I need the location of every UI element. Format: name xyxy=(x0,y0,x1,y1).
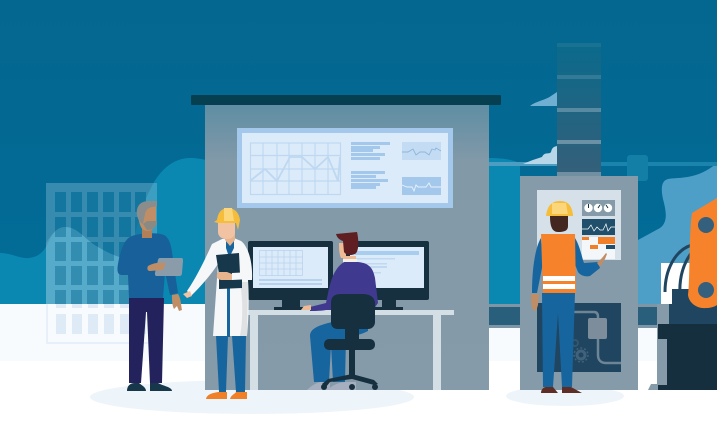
pipe band xyxy=(489,304,668,328)
pipe line xyxy=(489,155,717,181)
lower machine hatch xyxy=(537,303,621,372)
ground shadow under team xyxy=(90,380,414,414)
office chair xyxy=(321,294,378,390)
background sky xyxy=(0,0,717,304)
scientist in lab coat xyxy=(183,208,252,399)
machine cabinet xyxy=(520,43,638,390)
background office building xyxy=(46,183,157,344)
ground shadow under worker xyxy=(506,386,624,406)
clouds xyxy=(523,92,557,164)
floor xyxy=(0,304,717,444)
chimney xyxy=(557,43,601,176)
gear icons xyxy=(572,340,588,362)
robot arm xyxy=(648,198,717,390)
pulse chart bottom xyxy=(402,177,441,195)
light blue hill right xyxy=(638,163,717,304)
background hills right xyxy=(489,158,520,304)
tablet xyxy=(155,258,183,276)
desk xyxy=(247,310,454,390)
pulse readout xyxy=(582,219,615,235)
wall display xyxy=(237,128,453,208)
factory wall xyxy=(205,105,489,390)
text bars top xyxy=(351,142,390,160)
text bars bottom xyxy=(351,171,388,189)
clipboard xyxy=(216,253,242,289)
status grid xyxy=(582,237,615,259)
control panel xyxy=(537,190,621,260)
seated operator xyxy=(301,232,378,390)
monitor right xyxy=(345,241,429,310)
line chart xyxy=(250,143,340,194)
gauges xyxy=(582,200,615,216)
factory roof xyxy=(191,95,501,105)
monitor left xyxy=(248,241,333,310)
worker in hi-vis vest xyxy=(531,201,607,393)
pulse chart top xyxy=(402,142,441,160)
background hills left xyxy=(0,158,206,304)
man with tablet xyxy=(117,201,183,391)
